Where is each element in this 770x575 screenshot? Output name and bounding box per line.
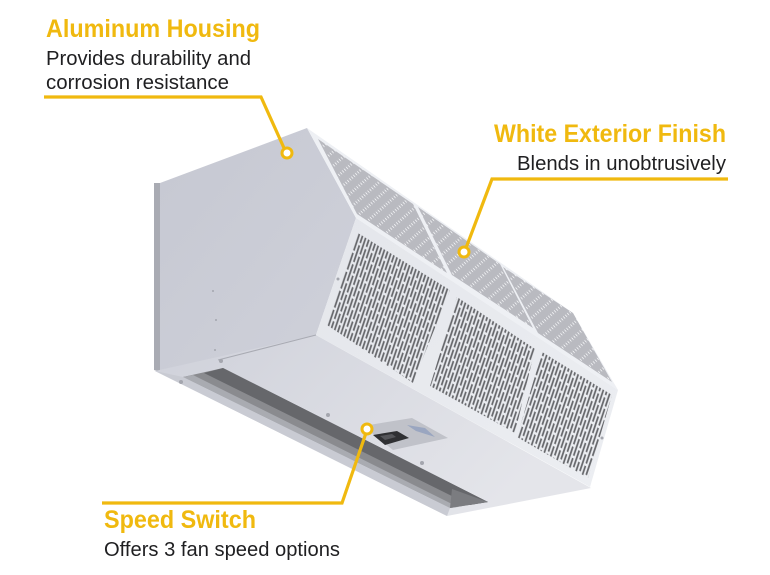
air discharge slot <box>155 368 488 516</box>
marker: aluminum housing <box>282 148 292 158</box>
front grille face <box>316 218 618 487</box>
heading: speed switch: Speed Switch <box>104 506 256 534</box>
heading: aluminum housing: Aluminum Housing <box>46 15 260 43</box>
bottom panel <box>155 335 591 516</box>
callout: white exterior finish <box>459 120 728 257</box>
callout: aluminum housing <box>44 15 292 158</box>
leader line: white exterior <box>466 179 728 248</box>
text: speed switch description: Offers 3 fan speed options <box>104 539 340 561</box>
text: aluminum housing description: Provides durability and <box>46 48 251 70</box>
marker: white exterior <box>459 247 469 257</box>
leader line: speed switch <box>102 433 366 503</box>
leader line: aluminum housing <box>44 97 284 148</box>
control plate with speed switch <box>363 418 448 450</box>
mounting screws <box>179 278 604 465</box>
side panel <box>160 128 356 372</box>
side panel seam <box>218 335 316 360</box>
top perforated face <box>307 128 618 390</box>
air curtain unit illustration <box>154 128 618 516</box>
rear mounting flange <box>154 183 161 372</box>
text: white exterior description: Blends in unobtrusively <box>517 153 726 175</box>
heading: white exterior finish: White Exterior Finish <box>494 120 726 148</box>
text: aluminum housing description: corrosion resistance <box>46 72 229 94</box>
callout: speed switch <box>102 424 372 561</box>
marker: speed switch <box>362 424 372 434</box>
